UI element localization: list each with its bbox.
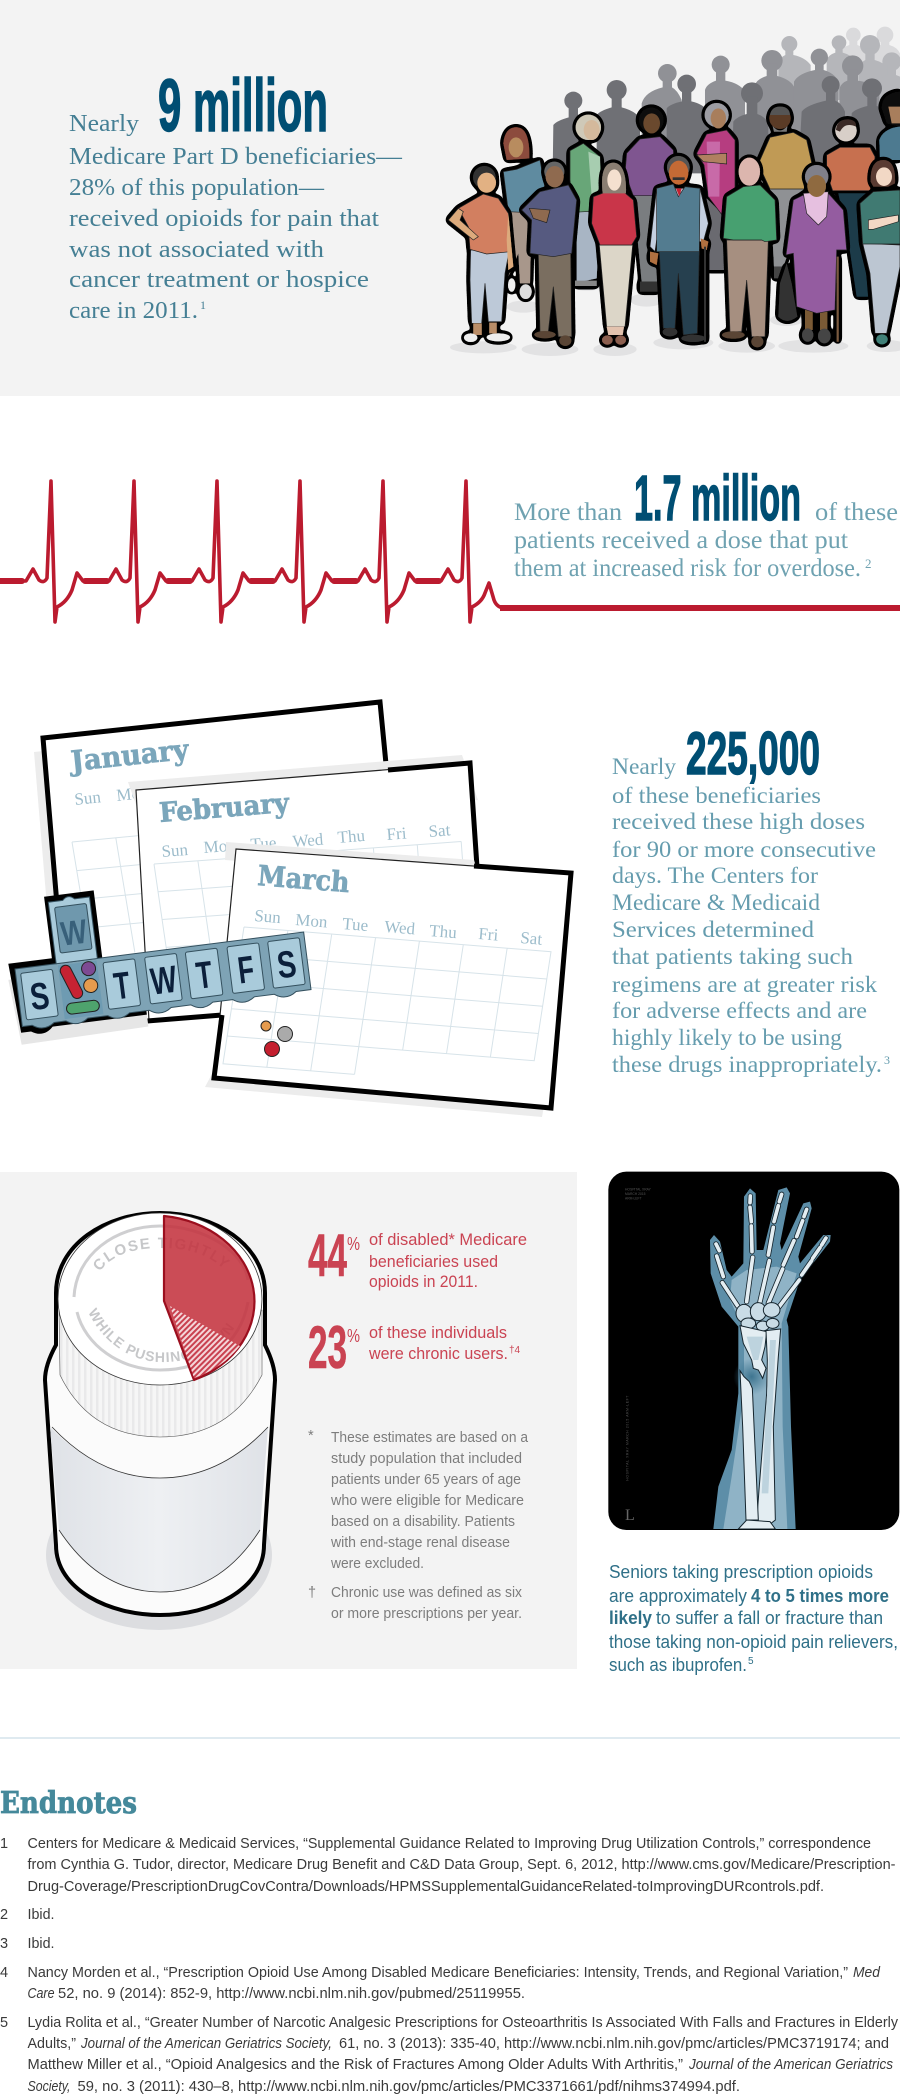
calendar: February: Sat <box>428 820 451 841</box>
text block: beneficiaries description: 1 <box>200 298 206 312</box>
calendar: February: Thu <box>337 826 366 847</box>
heading: Nearly 9 million <box>69 64 328 147</box>
text block: beneficiaries description: cancer treatment or hospice <box>69 267 369 293</box>
calendar: January: January <box>66 733 191 778</box>
endnotes list: Ibid. <box>28 1936 54 1952</box>
calendar: January: Wed <box>203 774 236 796</box>
person: rust shirt man <box>827 119 875 297</box>
text block: 225,000 high doses: that patients taking such <box>612 944 854 969</box>
text block: 1.7 million <box>514 462 898 582</box>
cap lettering <box>74 1226 248 1370</box>
person: green shirt man <box>722 158 777 347</box>
endnotes list: Drug-Coverage/PrescriptionDrugCovContra/Downloads/HPMSSupplementalGuidanceRelated-toImprovingDURcontrols.pdf. <box>28 1879 824 1895</box>
icon: weekly pill box: W <box>59 913 90 954</box>
endnotes list: 3 <box>0 1936 8 1952</box>
endnotes list: Care <box>28 1986 54 2002</box>
text block: 225,000 high doses: for adverse effects and are <box>612 998 867 1023</box>
endnotes list: Lydia Rolita et al., “Greater Number of Narcotic Analgesic Prescriptions for Osteoarthritis Is Associated With Falls and Fractures in Elderly <box>28 2015 899 2031</box>
calendar: March: Tue <box>342 914 369 935</box>
wrist bones <box>736 1303 780 1331</box>
text block: 225,000 high doses: days. The Centers for <box>612 863 818 888</box>
text block: beneficiaries description: Medicare Part D beneficiaries— <box>69 144 403 170</box>
finger bones <box>716 1194 826 1310</box>
calendar: February: Sun <box>161 840 189 861</box>
panel: 9 million beneficiaries <box>0 0 900 396</box>
stat: 23 percent <box>308 1314 521 1381</box>
endnotes list <box>0 1836 899 2095</box>
person: magenta cardigan woman <box>697 103 735 270</box>
stat: 44 percent: beneficiaries used <box>369 1252 498 1271</box>
calendar: February: Wed <box>292 830 324 851</box>
text block: beneficiaries description: 28% of this population— <box>69 175 325 201</box>
silhouettes: background crowd <box>553 27 900 173</box>
person: purple polo man <box>625 108 675 292</box>
footnotes: definitions <box>308 1428 529 1622</box>
calendar: February: February <box>158 788 291 829</box>
heading: Nearly 9 million: 9 million <box>158 64 328 147</box>
calendar: January <box>34 702 405 1014</box>
icon: weekly pill box: F <box>235 949 257 992</box>
endnotes list: Ibid. <box>28 1907 54 1923</box>
icon: weekly pill box: T <box>111 965 133 1008</box>
endnotes list: 59, no. 3 (2011): 430–8, http://www.ncbi.nlm.nih.gov/pmc/articles/PMC3371661/pdf/nihms374994.pdf. <box>78 2079 740 2095</box>
icon: pills in open compartment <box>58 960 101 1015</box>
text block: 1.7 million: of these <box>815 499 898 526</box>
text block: 225,000 high doses: 3 <box>884 1053 890 1067</box>
calendar: March: Thu <box>429 921 458 942</box>
text block: 225,000 high doses: 225,000 <box>686 720 820 787</box>
endnotes list: 2 <box>0 1907 8 1923</box>
text block: 225,000 high doses <box>612 720 890 1077</box>
endnotes list: Adults,” <box>28 2036 76 2052</box>
calendar: March: Mon <box>295 910 329 932</box>
person: vest man with cane <box>650 156 708 342</box>
calendar: January: Tue <box>161 779 189 801</box>
stat: 44 percent <box>308 1222 527 1291</box>
calendar: February: Fri <box>386 823 407 844</box>
text block: 225,000 high doses: of these beneficiaries <box>612 783 821 808</box>
icon: weekly pill box: S <box>275 943 299 987</box>
arm silhouette <box>710 1187 831 1529</box>
stat: 23 percent: % <box>347 1326 360 1346</box>
caption: fall and fracture risk: 5 <box>748 1656 754 1667</box>
footnotes: definitions: based on a disability. Patients <box>331 1514 515 1530</box>
pie wedge: 44 percent <box>164 1216 254 1380</box>
caption: fall and fracture risk: Seniors taking prescription opioids <box>609 1562 873 1582</box>
illustration: calendars and pill box <box>0 702 571 1117</box>
calendar: January: Sun <box>73 787 102 809</box>
footnotes: definitions: who were eligible for Medicare <box>330 1493 524 1509</box>
footnotes: definitions: patients under 65 years of age <box>331 1472 521 1488</box>
stat: 44 percent: 44 <box>308 1222 347 1289</box>
caption: fall and fracture risk <box>609 1562 898 1675</box>
illustration: pill bottle with pie chart <box>43 1211 277 1630</box>
x-ray labels: ARM-LEFT <box>625 1197 642 1201</box>
endnotes list: Centers for Medicare & Medicaid Services, “Supplemental Guidance Related to Improving Drug Utilization Controls,” correspondence <box>28 1836 871 1852</box>
footnotes: definitions: These estimates are based on a <box>331 1430 529 1446</box>
caption: fall and fracture risk: are approximately <box>609 1586 747 1606</box>
x-ray labels: HOSPITAL XRAY MARCH 2015 ARM-LEFT <box>625 1396 629 1481</box>
text block: beneficiaries description: was not associated with <box>69 237 324 263</box>
footnotes: definitions: * <box>308 1428 314 1444</box>
caption: fall and fracture risk: to suffer a fall or fracture than <box>656 1608 883 1628</box>
heading: Endnotes: Endnotes <box>0 1786 137 1821</box>
person: yellow sweater man <box>758 107 813 278</box>
footnotes: definitions: with end-stage renal disease <box>330 1535 510 1551</box>
footnotes: definitions: or more prescriptions per year. <box>331 1606 522 1622</box>
icon: weekly pill box: W <box>148 959 179 1004</box>
radius and ulna with fracture <box>738 1326 781 1529</box>
footnotes: definitions: † <box>308 1585 316 1601</box>
text block: 1.7 million: More than <box>514 499 623 526</box>
caption: fall and fracture risk: such as ibuprofen. <box>609 1655 747 1675</box>
person: far right teal woman <box>879 92 900 160</box>
panel: disabled beneficiaries <box>0 1172 577 1669</box>
calendar: February <box>128 755 488 1021</box>
calendar: February: Mon <box>203 835 237 857</box>
stat: 23 percent: were chronic users. <box>368 1344 508 1363</box>
x-ray labels: HOSPITAL XRAY <box>625 1187 652 1191</box>
stat: 44 percent: % <box>347 1234 360 1254</box>
text block: 225,000 high doses: regimens are at greater risk <box>612 972 878 997</box>
text block: 225,000 high doses: Medicare & Medicaid <box>612 890 820 915</box>
text block: 1.7 million: patients received a dose that put <box>514 527 848 554</box>
endnotes list: 52, no. 9 (2014): 852-9, http://www.ncbi.nlm.nih.gov/pubmed/25119955. <box>58 1986 525 2002</box>
text block: 1.7 million: 2 <box>865 556 872 571</box>
endnotes list: Nancy Morden et al., “Prescription Opioid Use Among Disabled Medicare Beneficiaries: Intensity, Trends, and Regional Variation,” <box>28 1965 848 1981</box>
footnotes: definitions: were excluded. <box>330 1556 424 1572</box>
calendar: March <box>205 842 571 1117</box>
person: green sweater woman <box>860 160 900 344</box>
x-ray labels <box>625 1187 652 1481</box>
endnotes list: 5 <box>0 2015 8 2031</box>
endnotes list: Journal of the American Geriatrics Society, <box>80 2036 332 2052</box>
calendar: January: Mon <box>115 783 150 805</box>
illustration: pill bottle with pie chart: WHILE PUSHING DOWN <box>89 1307 185 1362</box>
stat: 44 percent: of disabled* Medicare <box>369 1230 527 1249</box>
calendar: February: Tue <box>250 833 277 854</box>
illustration: pill bottle with pie chart: CLOSE TIGHTLY <box>94 1238 163 1270</box>
icon: weekly pill box <box>0 865 313 1045</box>
chart: heartbeat line <box>0 481 900 622</box>
caption: fall and fracture risk: 4 to 5 times more <box>751 1586 889 1606</box>
stat: 23 percent: of these individuals <box>369 1323 507 1342</box>
calendar: March: Sat <box>520 928 543 949</box>
caption: fall and fracture risk: likely <box>609 1608 652 1628</box>
endnotes list: 61, no. 3 (2013): 335-40, http://www.ncbi.nlm.nih.gov/pmc/articles/PMC3719174; and <box>339 2036 889 2052</box>
text block: 225,000 high doses: for 90 or more consecutive <box>612 837 876 862</box>
endnotes list: Society, <box>28 2079 70 2095</box>
endnotes list: 4 <box>0 1965 8 1981</box>
icon: loose pills <box>261 1021 292 1056</box>
footnotes: definitions: study population that included <box>331 1451 522 1467</box>
endnotes list: Matthew Miller et al., “Opioid Analgesics and the Risk of Fractures Among Older Adults With Arthritis,” <box>28 2057 683 2073</box>
stat: 23 percent: †4 <box>509 1345 521 1356</box>
calendar: March: March <box>256 859 351 899</box>
person: red sweater woman <box>592 163 637 345</box>
calendar: January: Fri <box>298 764 320 785</box>
text block: beneficiaries description: care in 2011. <box>69 298 198 324</box>
person: orange top woman <box>448 166 513 342</box>
illustration: crowd of people <box>448 27 900 356</box>
calendar: March: Wed <box>384 917 416 938</box>
text block: 1.7 million: them at increased risk for overdose. <box>514 555 861 582</box>
heading: Nearly 9 million: Nearly <box>69 111 139 137</box>
endnotes list: from Cynthia G. Tudor, director, Medicare Drug Benefit and C&D Data Group, Sept. 6, 2012, http://www.cms.gov/Medicare/Prescription- <box>28 1857 896 1873</box>
calendar: March: Fri <box>478 924 499 945</box>
illustration: arm x-ray <box>608 1172 899 1530</box>
person: navy shirt man <box>522 162 577 346</box>
person: purple dress woman with cane and bag <box>778 165 847 343</box>
person: teal sweater woman <box>503 127 545 299</box>
person: green cardigan woman <box>570 115 603 286</box>
calendar: January: Sat <box>340 760 364 781</box>
calendar: March: Sun <box>254 906 282 927</box>
text block: 225,000 high doses: these drugs inappropriately. <box>612 1052 882 1077</box>
footnotes: definitions: Chronic use was defined as six <box>331 1585 523 1601</box>
text block: 225,000 high doses: received these high doses <box>612 809 865 834</box>
pie wedge: 23 percent hatch <box>170 1306 240 1378</box>
text block: 225,000 high doses: Nearly <box>612 754 677 779</box>
endnotes list: Med <box>853 1965 881 1981</box>
ground shadows <box>450 283 900 356</box>
calendar: January: Thu <box>249 768 279 790</box>
text block: beneficiaries description: received opioids for pain that <box>69 206 379 232</box>
illustration: arm x-ray: L <box>625 1507 635 1524</box>
text block: 225,000 high doses: Services determined <box>612 917 815 942</box>
text block: 225,000 high doses: highly likely to be using <box>612 1025 843 1050</box>
text block: beneficiaries description <box>69 144 403 324</box>
x-ray labels: MARCH 2015 <box>625 1192 646 1196</box>
icon: weekly pill box: T <box>194 954 215 998</box>
endnotes list: 1 <box>0 1836 8 1852</box>
stat: 44 percent: opioids in 2011. <box>369 1272 478 1291</box>
icon: weekly pill box: S <box>28 975 52 1019</box>
stat: 23 percent: 23 <box>308 1314 347 1381</box>
